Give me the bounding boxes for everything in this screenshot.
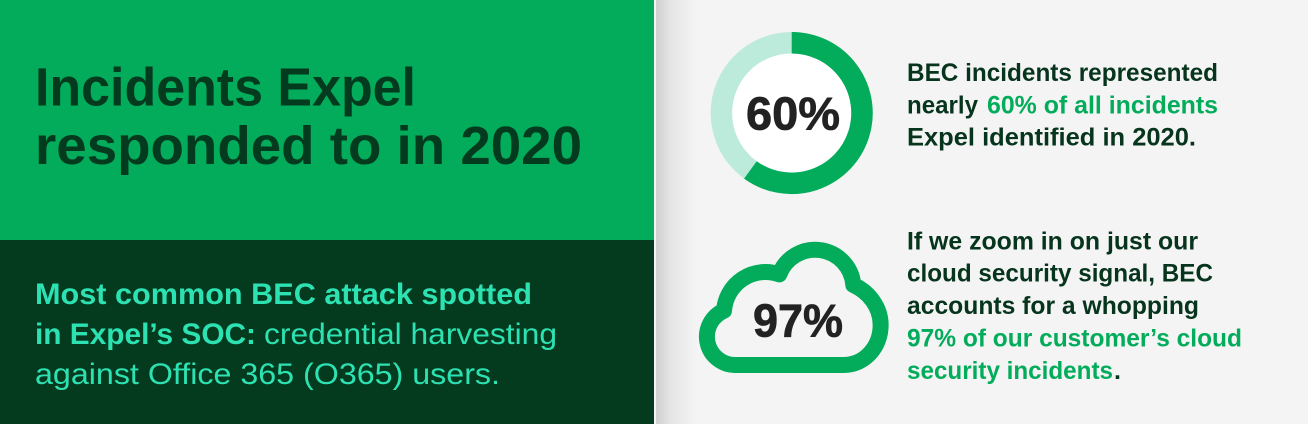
title: [35, 58, 582, 176]
text: 60% statistic: Expel identified in 2020.: [907, 124, 1196, 152]
icon: cloud with 97%: [707, 250, 881, 365]
text: 97% statistic: If we zoom in on just our: [907, 227, 1198, 255]
text: 97% statistic: [907, 227, 1242, 385]
donut chart: 60%: [721, 43, 862, 183]
callout text: Most common BEC attack spotted: [35, 278, 532, 311]
panel: green title panel: [0, 0, 654, 240]
panel: dark callout panel: [0, 240, 654, 424]
donut chart: 60%: 60%: [746, 87, 840, 139]
callout text: against Office 365 (O365) users.: [35, 358, 500, 391]
icon: cloud with 97%: 97%: [753, 295, 843, 347]
text: 60% statistic: BEC incidents represented: [907, 59, 1218, 87]
callout text: in Expel’s SOC:: [35, 318, 256, 351]
text: 97% statistic: cloud security signal, BEC: [907, 260, 1213, 288]
text: 60% statistic: [907, 59, 1218, 152]
title: Incidents Expel: [35, 58, 416, 118]
text: 97% statistic: 97% of our customer’s cloud: [907, 325, 1242, 353]
panel: right background: [654, 0, 1308, 424]
text: 97% statistic: security incidents: [907, 357, 1113, 385]
text: 97% statistic: accounts for a whopping: [907, 292, 1199, 320]
text: 97% statistic: .: [1114, 357, 1121, 385]
title: responded to in 2020: [35, 116, 582, 176]
text: 60% statistic: nearly: [907, 91, 978, 119]
text: 60% statistic: 60% of all incidents: [987, 91, 1218, 119]
callout text: [35, 278, 557, 391]
callout text: credential harvesting: [264, 318, 557, 351]
